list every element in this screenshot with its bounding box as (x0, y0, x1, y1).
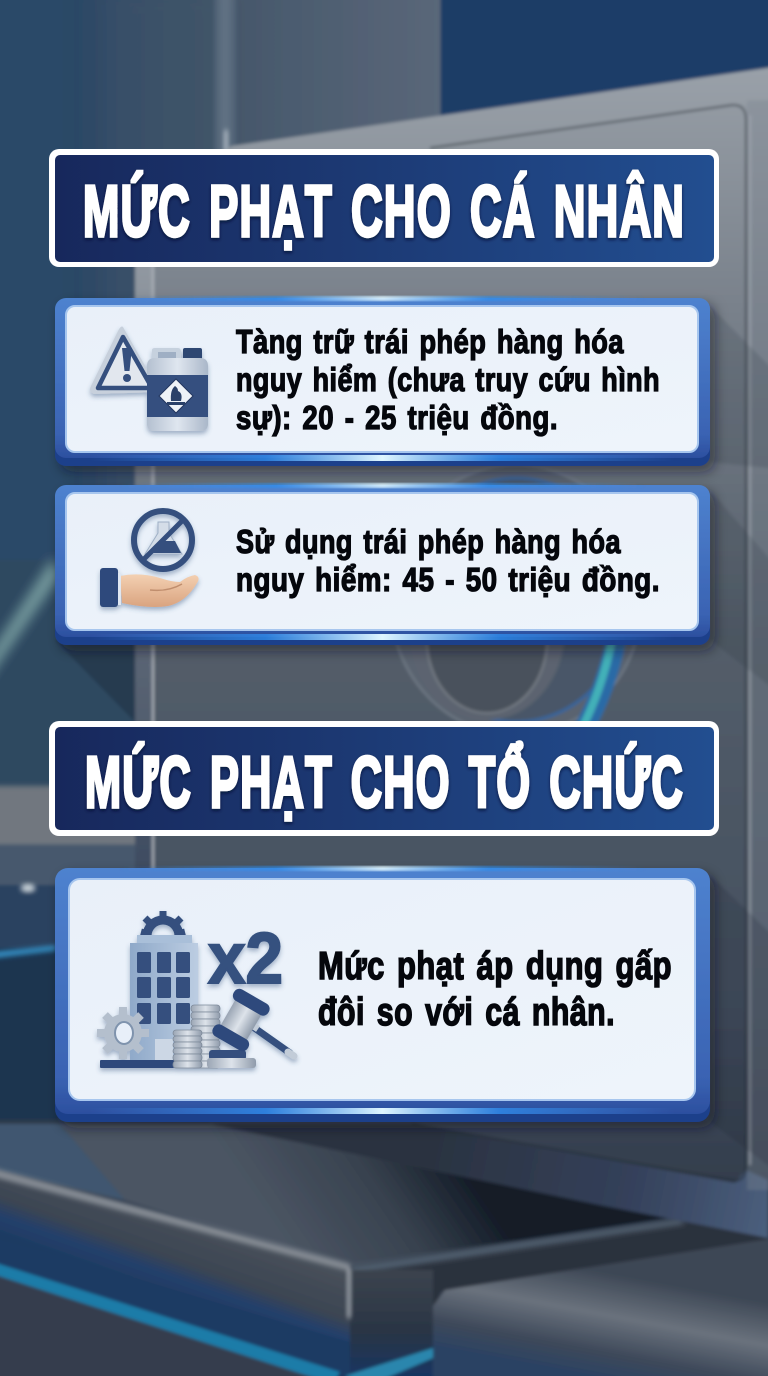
panel: usage fine (55, 483, 710, 645)
text: storage fine: Tàng trữ trái phép hàng hóa (236, 323, 624, 360)
icon: warning triangle and chemical jug (90, 326, 208, 431)
icon: company, x2, coins and gavel: x2 (208, 919, 283, 999)
icon: banned flask over hand (100, 511, 199, 607)
icon: coin stacks (173, 1005, 220, 1068)
panel: storage fine (55, 296, 710, 466)
text: storage fine (236, 323, 660, 436)
text: organization fine (318, 945, 672, 1034)
icon: gear (97, 1007, 149, 1059)
text: organization fine: Mức phạt áp dụng gấp (318, 945, 672, 988)
text: organization fine: đôi so với cá nhân. (318, 991, 615, 1034)
icon: company, x2, coins and gavel (97, 911, 294, 1068)
panel: organization fine (55, 866, 710, 1122)
text: usage fine: nguy hiểm: 45 - 50 triệu đồng. (236, 561, 660, 598)
card cast shadows (55, 640, 135, 722)
heading: mức phạt cho tổ chức (49, 721, 719, 836)
text: storage fine: nguy hiểm (chưa truy cứu hình (236, 361, 660, 398)
vault wheel (390, 465, 642, 735)
icon: gavel (207, 987, 294, 1068)
door (135, 65, 768, 1240)
text: storage fine: sự): 20 - 25 triệu đồng. (236, 399, 558, 436)
bottom shelves (0, 1120, 768, 1376)
text: usage fine: Sử dụng trái phép hàng hóa (236, 523, 621, 560)
heading: mức phạt cho cá nhân (49, 149, 719, 267)
text: usage fine (236, 523, 660, 598)
